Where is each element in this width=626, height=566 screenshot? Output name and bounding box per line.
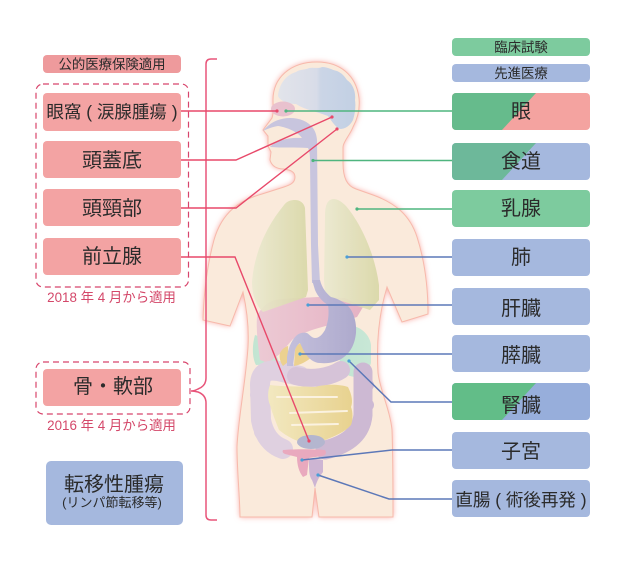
- connector dots: blue: [298, 255, 351, 477]
- label: bone and soft tissue: 骨・軟部: [73, 375, 153, 398]
- label: metastatic tumor: (リンパ節転移等): [62, 495, 162, 510]
- bladder: [297, 435, 325, 449]
- legend: advanced medical care: [452, 64, 590, 82]
- bracket: [191, 59, 217, 520]
- label: metastatic tumor: 転移性腫瘍: [64, 473, 164, 496]
- stomach and duodenum: [287, 280, 356, 366]
- connector dots: pink: [275, 109, 339, 443]
- label: skull base: [43, 141, 181, 178]
- label: prostate: 前立腺: [82, 245, 142, 268]
- legend: clinical trial: 臨床試験: [494, 40, 548, 55]
- connector dots: green: [284, 109, 359, 211]
- human body figure: [203, 62, 428, 517]
- label: eye: 眼: [511, 101, 531, 123]
- small intestine: [268, 385, 352, 441]
- pancreas: [280, 343, 312, 366]
- label: esophagus: [452, 143, 590, 180]
- note: from April 2016: 2016 年 4 月から適用: [47, 418, 176, 433]
- label: kidney: [452, 383, 590, 420]
- uterus: [283, 449, 326, 477]
- label: uterus: [452, 432, 590, 469]
- label: kidney: 腎臓: [501, 394, 541, 417]
- label: rectum: 直腸 ( 術後再発 ): [455, 490, 587, 510]
- nasal cavity and esophagus: [263, 118, 320, 283]
- brain: [278, 67, 355, 129]
- label: orbit: 眼窩 ( 涙腺腫瘍 ): [46, 102, 178, 122]
- label: bone and soft tissue: [43, 369, 181, 406]
- label: liver: 肝臓: [501, 297, 541, 320]
- label: breast: [452, 190, 590, 227]
- eye orbit: [271, 102, 295, 116]
- label: pancreas: 膵臓: [501, 344, 541, 367]
- label: eye: [452, 93, 590, 130]
- label: head and neck: [43, 189, 181, 226]
- heading: public insurance: [43, 55, 181, 73]
- dashed group 2016: [36, 362, 190, 414]
- connector lines: pink: [181, 111, 337, 441]
- legend: clinical trial: [452, 38, 590, 56]
- spleen and gallbladder area: [253, 326, 371, 377]
- legend: advanced medical care: 先進医療: [494, 66, 548, 81]
- heading: public insurance: 公的医療保険適用: [58, 57, 166, 72]
- lungs: [252, 199, 379, 312]
- label: skull base: 頭蓋底: [82, 149, 142, 172]
- connector lines: blue: [300, 257, 452, 499]
- label: pancreas: [452, 335, 590, 372]
- label: prostate: [43, 238, 181, 275]
- label: lung: [452, 239, 590, 276]
- label: orbit: [43, 93, 181, 131]
- note: from April 2018: 2018 年 4 月から適用: [47, 290, 176, 305]
- label: esophagus: 食道: [501, 150, 541, 173]
- large intestine: [250, 370, 374, 450]
- label: uterus: 子宮: [501, 440, 541, 463]
- label: liver: [452, 288, 590, 325]
- rectum: [309, 459, 323, 488]
- dashed group 2018: [36, 84, 188, 287]
- label: breast: 乳腺: [501, 197, 541, 220]
- label: metastatic tumor: [46, 461, 183, 525]
- label: head and neck: 頭頸部: [82, 197, 142, 220]
- label: lung: 肺: [511, 247, 531, 269]
- label: rectum: [452, 480, 590, 517]
- liver: [257, 297, 363, 363]
- connector lines: green: [286, 111, 452, 209]
